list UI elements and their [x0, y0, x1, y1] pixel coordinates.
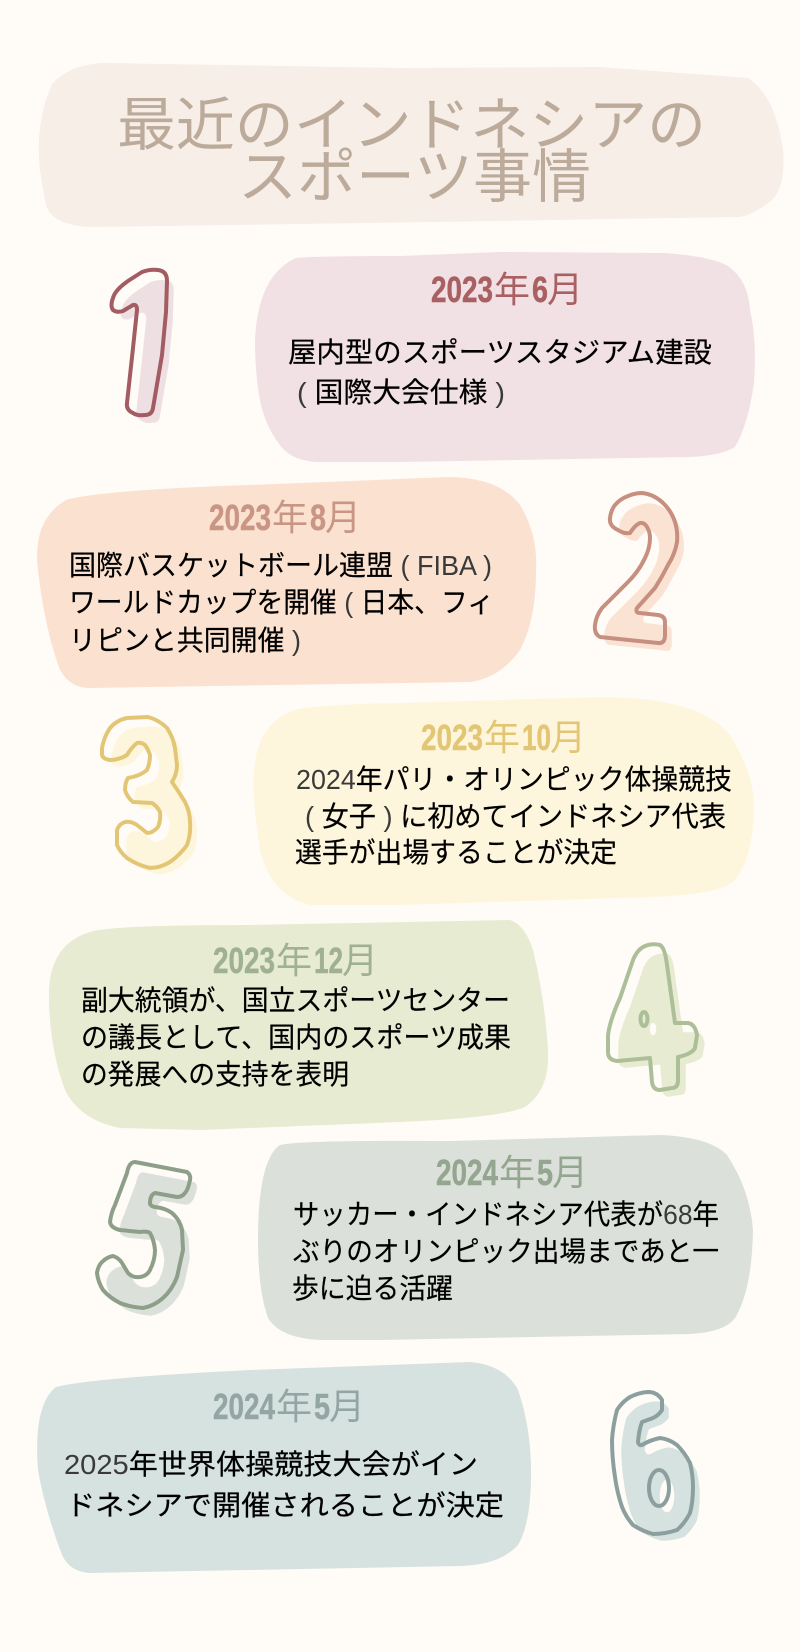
number 4	[608, 944, 706, 1098]
body text	[295, 764, 732, 868]
body text: ぶりのオリンピック出場まであと一	[293, 1236, 719, 1267]
title	[117, 78, 706, 214]
number 6	[612, 1392, 701, 1542]
date heading: 年	[484, 709, 520, 761]
panel: 2023年8月	[37, 477, 536, 688]
body text: 国際バスケットボール連盟 ( FIBA )	[69, 550, 492, 581]
date heading: 2023	[421, 717, 483, 758]
date heading: 2023	[209, 497, 271, 538]
date heading: 6	[532, 269, 548, 310]
body text: ドネシアで開催されることが決定	[66, 1490, 504, 1521]
body text: 副大統領が、国立スポーツセンター	[81, 985, 510, 1016]
date heading: 年	[272, 489, 308, 541]
date heading	[431, 261, 583, 313]
panel: 2024年5月 体操	[37, 1362, 531, 1573]
date heading: 2023	[213, 940, 275, 981]
date heading: 5	[314, 1386, 330, 1427]
body text	[292, 1199, 719, 1304]
date heading: 12	[314, 940, 343, 981]
number 3	[102, 717, 198, 876]
date heading: 月	[325, 489, 361, 541]
date heading	[436, 1144, 588, 1196]
title: スポーツ事情	[238, 130, 591, 214]
date heading: 月	[329, 1378, 365, 1430]
body text: サッカー・インドネシア代表が68年	[293, 1199, 719, 1230]
body text	[288, 337, 712, 408]
date heading: 2024	[436, 1152, 498, 1193]
panel: 2023年12月	[49, 920, 548, 1130]
date heading: 月	[550, 709, 586, 761]
number 5	[97, 1162, 198, 1317]
number 2	[595, 493, 685, 652]
date heading: 2023	[431, 269, 493, 310]
panel: 2024年5月 サッカー	[258, 1135, 753, 1340]
body text: 歩に迫る活躍	[292, 1273, 453, 1304]
body text: の発展への支持を表明	[81, 1059, 349, 1090]
body text	[64, 1449, 504, 1521]
body text: ( 国際大会仕様 )	[297, 377, 505, 408]
date heading: 8	[310, 497, 326, 538]
body text	[81, 985, 511, 1090]
body text: リピンと共同開催 )	[69, 625, 301, 656]
date heading: 月	[342, 932, 378, 984]
body text: 2024年パリ・オリンピック体操競技	[296, 764, 732, 795]
date heading	[213, 932, 378, 984]
date heading	[209, 489, 361, 541]
body text: 2025年世界体操競技大会がイン	[64, 1449, 478, 1480]
date heading: 年	[499, 1144, 535, 1196]
panel: 2023年6月	[255, 252, 755, 462]
body text: ワールドカップを開催 ( 日本、フィ	[69, 587, 494, 618]
body text: ( 女子 ) に初めてインドネシア代表	[305, 801, 726, 832]
date heading: 月	[552, 1144, 588, 1196]
date heading: 2024	[213, 1386, 275, 1427]
date heading	[421, 709, 586, 761]
date heading: 年	[494, 261, 530, 313]
date heading: 10	[522, 717, 551, 758]
body text: の議長として、国内のスポーツ成果	[81, 1022, 511, 1053]
body text	[69, 550, 494, 656]
panel: 2023年10月	[254, 697, 754, 905]
date heading: 月	[547, 261, 583, 313]
date heading	[213, 1378, 365, 1430]
date heading: 年	[276, 932, 312, 984]
body text: 選手が出場することが決定	[295, 837, 617, 868]
title banner	[39, 63, 784, 227]
body text: 屋内型のスポーツスタジアム建設	[288, 337, 712, 368]
number 1	[112, 270, 175, 424]
date heading: 5	[537, 1152, 553, 1193]
date heading: 年	[276, 1378, 312, 1430]
title: 最近のインドネシアの	[117, 78, 706, 162]
